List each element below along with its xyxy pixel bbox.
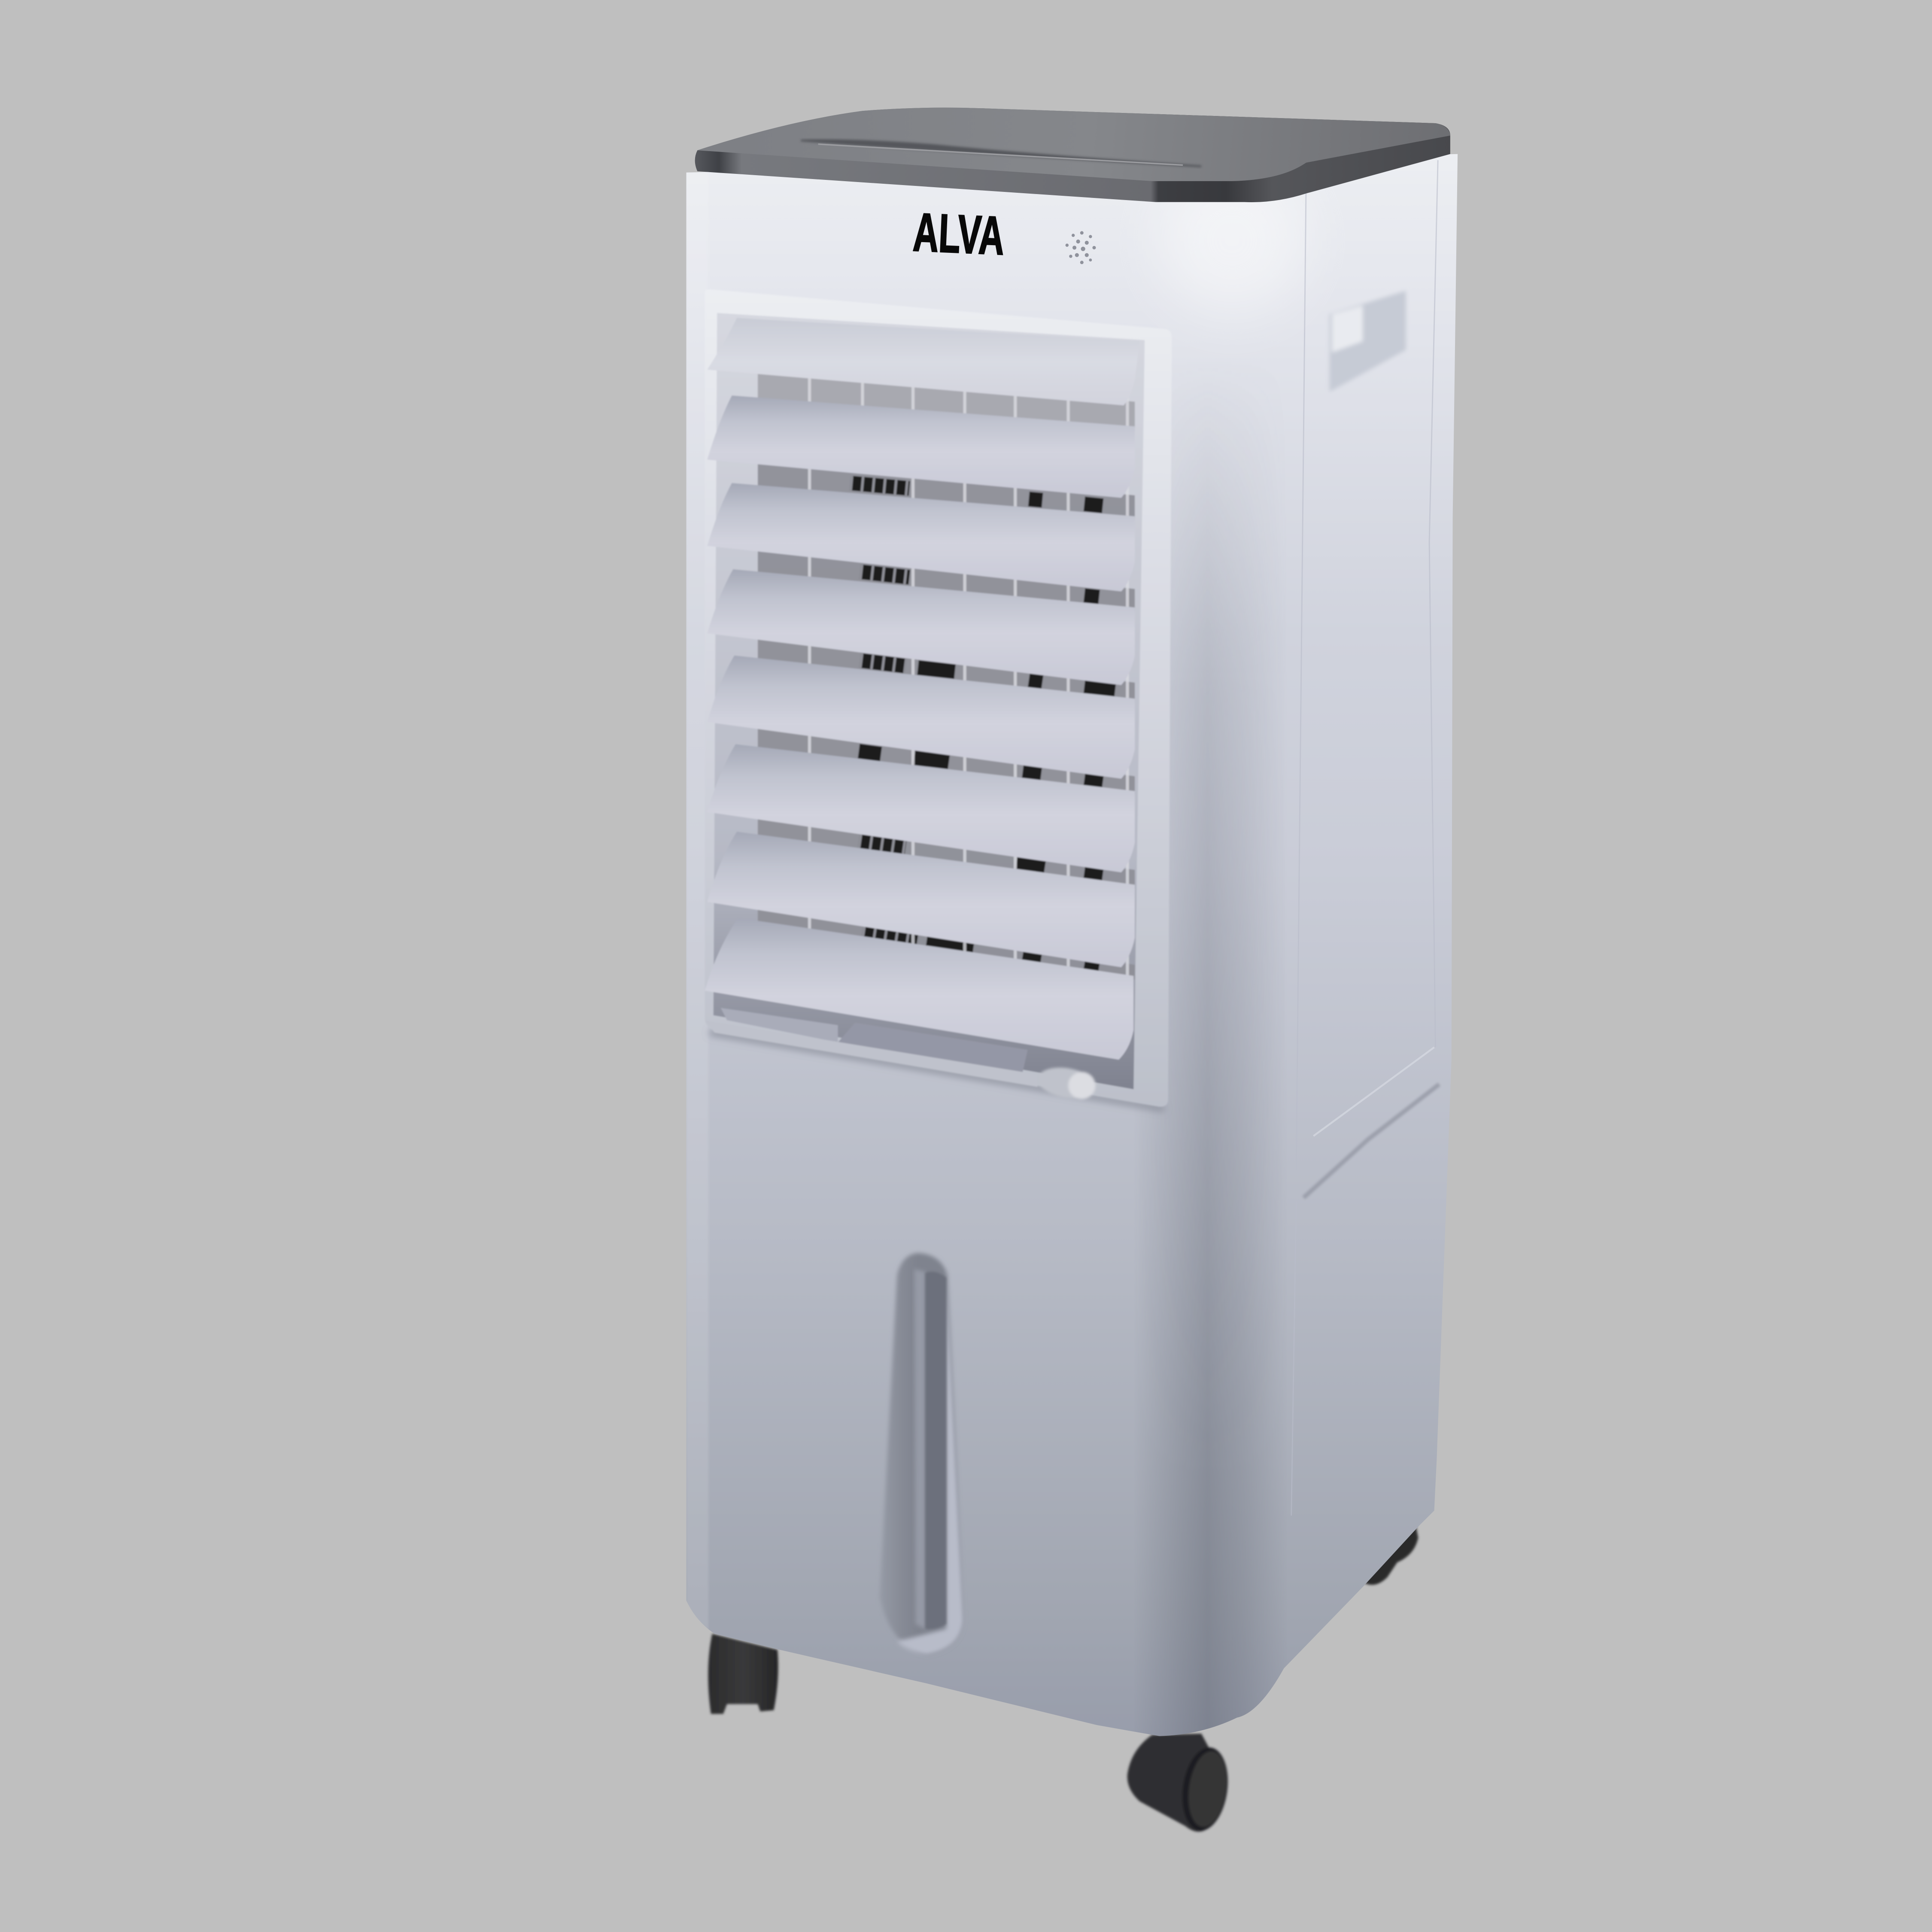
slat 4 <box>707 569 1135 685</box>
frame bottom shadow <box>710 1033 1164 1109</box>
diagonal side panel joint <box>1303 1047 1439 1198</box>
remote sensor dots <box>1066 231 1096 264</box>
grille dark fan blocks <box>850 483 1115 967</box>
slat 8 <box>705 918 1133 1060</box>
grille fan hatching <box>850 483 918 940</box>
rear caster wheel <box>1363 1525 1418 1585</box>
slat 5 <box>707 656 1135 779</box>
slat 2 <box>707 395 1135 498</box>
front-left caster wheel <box>708 1634 778 1714</box>
air cooler infographic canvas <box>686 107 1458 1834</box>
lower deflector pieces <box>705 1008 1037 1087</box>
side carry handle <box>1330 291 1406 392</box>
window gauge slot <box>925 1272 946 1629</box>
louver inner opening <box>714 313 1145 1089</box>
front-right caster wheel <box>1127 1734 1233 1834</box>
louver panel <box>705 289 1172 1109</box>
side panel seams <box>1291 160 1438 1516</box>
slat 6 <box>707 744 1135 872</box>
cooler body <box>687 154 1458 1750</box>
slat 3 <box>707 483 1135 592</box>
brand logo: ALVA <box>912 202 1005 266</box>
window right lip <box>897 1269 963 1655</box>
window recess <box>880 1253 963 1655</box>
top lid <box>695 108 1450 202</box>
slat 7 <box>707 832 1135 967</box>
adjustment knob <box>1036 1063 1099 1103</box>
louver frame <box>705 289 1172 1107</box>
grille bands behind slats <box>758 370 1135 986</box>
water level window <box>880 1253 963 1655</box>
window gauge strip <box>914 1269 925 1629</box>
slat 1 <box>707 318 1140 405</box>
grille separators <box>810 370 1127 986</box>
